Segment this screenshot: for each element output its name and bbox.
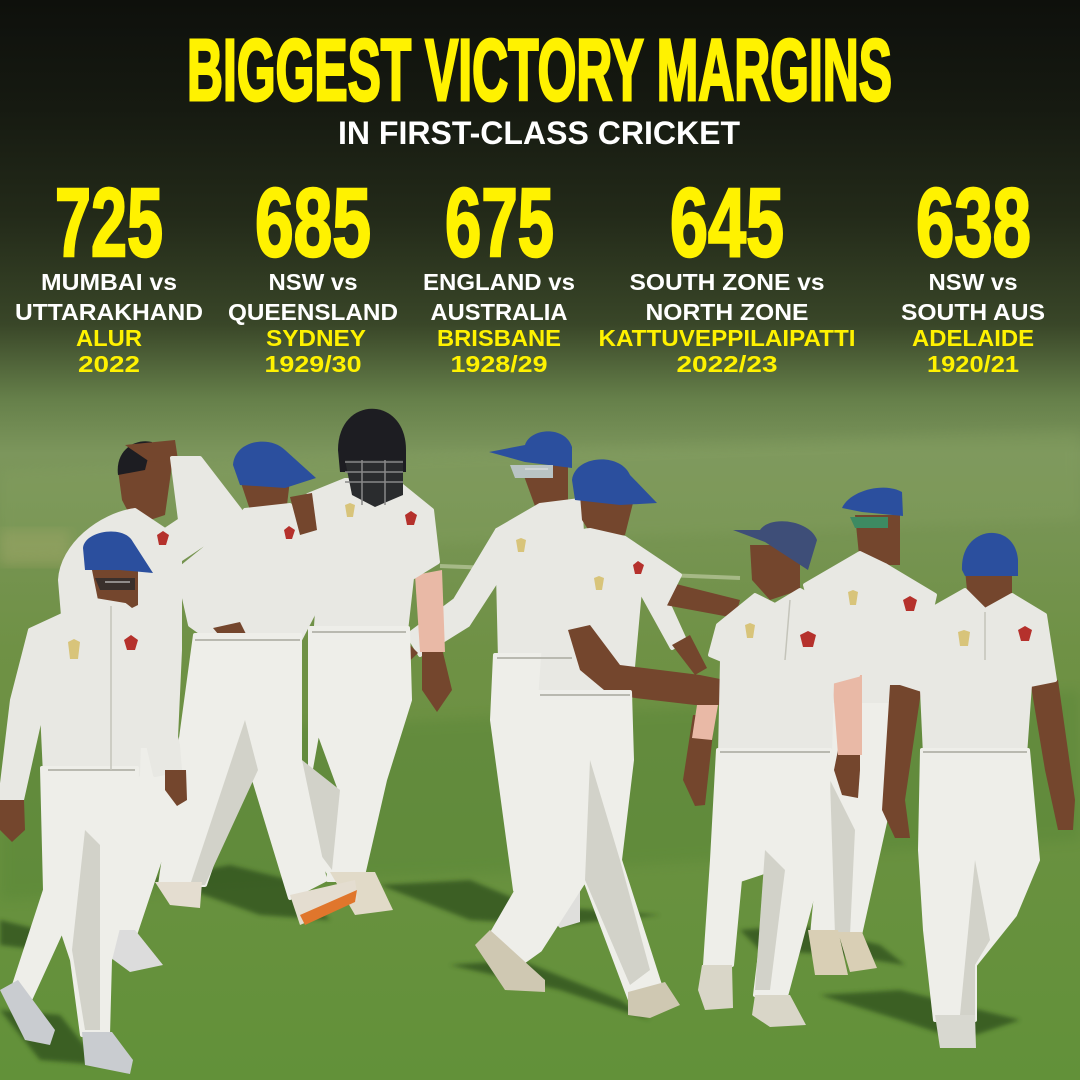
stat: 638 NSW vs South Aus — [901, 168, 1045, 377]
player 8: back right with sunglasses — [805, 488, 935, 975]
stat: 675 England vs Australia: AUSTRALIA — [430, 299, 568, 325]
player 4: batter with helmet — [300, 409, 452, 915]
player 9: front right — [882, 533, 1075, 1048]
player 7: smiling, centre right — [683, 521, 862, 1027]
stat: 725 Mumbai vs Uttarakhand: MUMBAI vs — [41, 269, 177, 295]
stat: 685 NSW vs Queensland: 1929/30 — [264, 351, 362, 377]
stat: 638 NSW vs South Aus: 638 — [916, 168, 1031, 277]
player 2: hand on head — [60, 440, 240, 972]
stat: 675 England vs Australia: ENGLAND vs — [423, 269, 575, 295]
player 3: blue cap, hand to chin — [155, 442, 358, 925]
stat: 675 England vs Australia — [423, 168, 575, 377]
stat: 685 NSW vs Queensland: 685 — [255, 168, 371, 277]
stat: 725 Mumbai vs Uttarakhand: UTTARAKHAND — [15, 299, 203, 325]
stat: 675 England vs Australia: 1928/29 — [450, 351, 548, 377]
player 6: centre, arm outstretched — [475, 459, 740, 1018]
player 5: back centre with blue cap — [375, 431, 707, 928]
stat: 675 England vs Australia: 675 — [445, 168, 554, 277]
stat: 725 Mumbai vs Uttarakhand: 725 — [55, 168, 163, 277]
stat: 685 NSW vs Queensland: QUEENSLAND — [228, 299, 398, 325]
stat: 685 NSW vs Queensland — [228, 168, 398, 377]
stat: 645 South Zone vs North Zone: NORTH ZONE — [646, 299, 808, 325]
stat: 725 Mumbai vs Uttarakhand — [15, 168, 203, 377]
stat: 675 England vs Australia: BRISBANE — [437, 325, 561, 351]
stat: 638 NSW vs South Aus: SOUTH AUS — [901, 299, 1045, 325]
stat: 685 NSW vs Queensland: NSW vs — [268, 269, 358, 295]
stat: 638 NSW vs South Aus: ADELAIDE — [912, 325, 1034, 351]
stat: 645 South Zone vs North Zone: 2022/23 — [676, 351, 778, 377]
stat: 645 South Zone vs North Zone: KATTUVEPPILAIPATTI — [598, 325, 856, 351]
subtitle: IN FIRST-CLASS CRICKET — [338, 115, 740, 151]
stat: 685 NSW vs Queensland: SYDNEY — [266, 325, 366, 351]
stat: 645 South Zone vs North Zone — [598, 168, 856, 377]
stat: 645 South Zone vs North Zone: 645 — [670, 168, 784, 277]
player 1: front left — [0, 532, 187, 1074]
ground shadows — [0, 865, 1020, 1065]
stat: 638 NSW vs South Aus: NSW vs — [928, 269, 1018, 295]
stat: 638 NSW vs South Aus: 1920/21 — [927, 351, 1019, 377]
stat: 725 Mumbai vs Uttarakhand: 2022 — [78, 351, 140, 377]
jersey badges and kit details — [48, 469, 1032, 770]
stat: 645 South Zone vs North Zone: SOUTH ZONE vs — [630, 269, 824, 295]
stat: 725 Mumbai vs Uttarakhand: ALUR — [76, 325, 142, 351]
